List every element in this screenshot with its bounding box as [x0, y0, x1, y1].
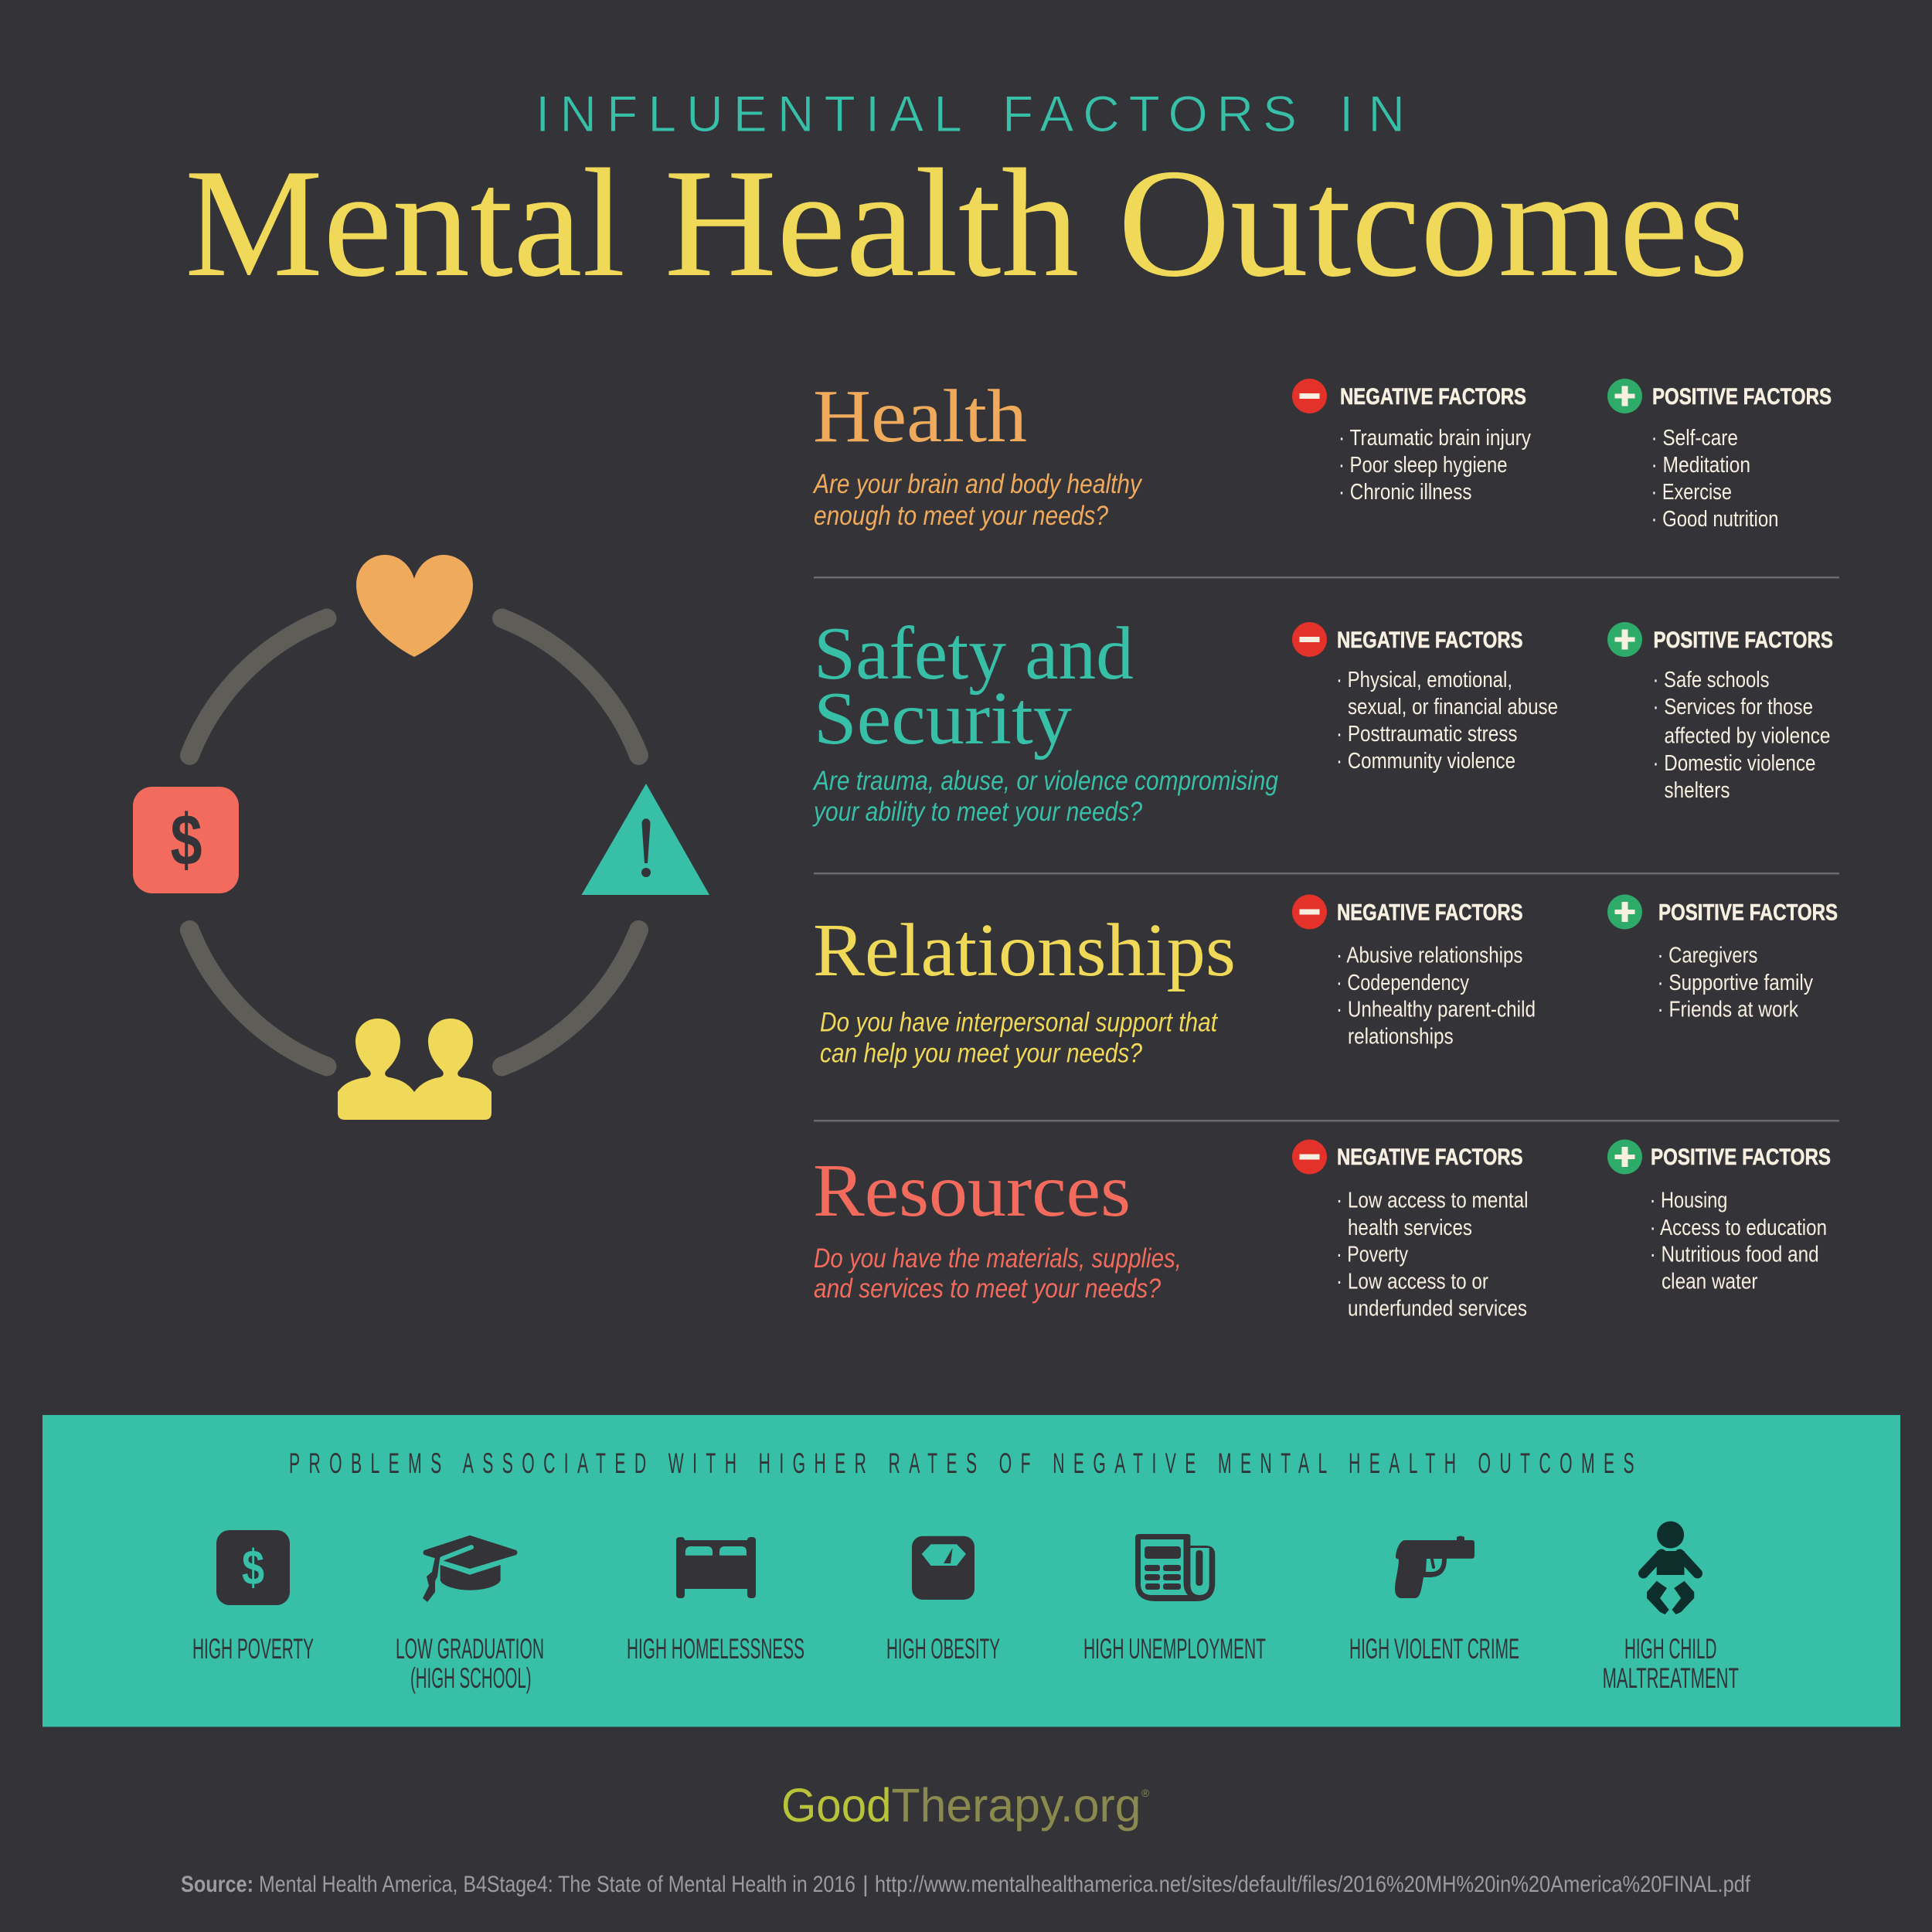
question: safety: Are trauma, abuse, or violence compromising	[812, 766, 1278, 796]
icon: dollar	[216, 1530, 290, 1605]
item: high unemployment	[1083, 1534, 1266, 1665]
question: resources	[814, 1243, 1182, 1304]
label: HIGH CHILD	[1624, 1633, 1717, 1665]
positive factors list: · Housing	[1650, 1189, 1727, 1213]
title: influential factors in: FACTORS	[1002, 85, 1297, 142]
logo: goodtherapy.org: Good	[781, 1779, 892, 1832]
icon: newspaper	[1135, 1534, 1215, 1601]
icon: heart	[356, 555, 473, 657]
icon: dollar box: $	[170, 799, 202, 880]
cycle diagram	[133, 555, 709, 1120]
icon: plus	[1607, 1139, 1642, 1175]
panel: problems band	[43, 1415, 1900, 1726]
negative factors list: health services	[1348, 1216, 1472, 1240]
icon: minus	[1292, 379, 1327, 413]
question: safety	[812, 766, 1278, 827]
icon: minus	[1292, 1139, 1327, 1175]
negative factors list: · Low access to mental	[1336, 1189, 1529, 1213]
logo: goodtherapy.org	[781, 1779, 1150, 1832]
positive factors list: · Domestic violence	[1652, 751, 1816, 776]
logo: goodtherapy.org: Therapy.org	[892, 1779, 1141, 1832]
positive factors list: · Good nutrition	[1651, 507, 1779, 532]
heading: safety and security	[814, 612, 1134, 760]
icon: baby	[1643, 1521, 1697, 1614]
positive factors heading: POSITIVE FACTORS	[1658, 900, 1838, 926]
question: health	[812, 469, 1143, 531]
positive factors list: · Services for those	[1652, 695, 1813, 719]
negative factors list: · Posttraumatic stress	[1336, 722, 1518, 747]
negative factors list: · Codependency	[1336, 971, 1469, 995]
question: resources: and services to meet your needs?	[814, 1274, 1161, 1304]
positive factors list	[1651, 426, 1779, 532]
icon: minus	[1292, 895, 1327, 929]
question: relationships: Do you have interpersonal support that	[820, 1008, 1218, 1037]
positive factors list: · Exercise	[1651, 480, 1732, 505]
negative factors list: · Low access to or	[1336, 1269, 1488, 1294]
heading: safety and security: Security	[814, 677, 1072, 760]
title: mental health outcomes: Mental Health Outcomes	[185, 138, 1749, 309]
negative factors heading: NEGATIVE FACTORS	[1337, 628, 1522, 653]
item: low graduation	[396, 1536, 544, 1694]
negative factors heading: NEGATIVE FACTORS	[1337, 1145, 1522, 1170]
label: HIGH VIOLENT CRIME	[1349, 1633, 1519, 1665]
icon: dollar box	[133, 787, 239, 893]
icon: plus	[1607, 895, 1642, 929]
negative factors list	[1336, 668, 1558, 774]
title: influential factors in	[536, 85, 1405, 142]
item: high violent crime	[1349, 1536, 1519, 1665]
title: influential factors in: IN	[1339, 85, 1405, 142]
icon: bed	[676, 1537, 756, 1598]
positive factors list: · Safe schools	[1652, 668, 1770, 692]
positive factors list	[1650, 1189, 1827, 1294]
label: (HIGH SCHOOL)	[410, 1662, 532, 1694]
positive factors heading: POSITIVE FACTORS	[1654, 628, 1833, 653]
heading: health: Health	[813, 375, 1027, 458]
label	[396, 1633, 544, 1694]
positive factors list: clean water	[1662, 1269, 1758, 1294]
positive factors list	[1652, 668, 1830, 803]
heading: resources: Resources	[813, 1149, 1131, 1233]
icon: two people	[338, 1019, 492, 1120]
label: LOW GRADUATION	[396, 1633, 544, 1665]
positive factors list: · Supportive family	[1657, 971, 1813, 995]
icon: graduation cap	[423, 1536, 518, 1602]
panel: relationships	[813, 895, 1838, 1068]
label: HIGH POVERTY	[192, 1633, 314, 1665]
heading: safety and security: Safety and	[814, 612, 1134, 696]
negative factors list: sexual, or financial abuse	[1348, 695, 1558, 719]
logo: goodtherapy.org: ®	[1141, 1787, 1150, 1799]
question: health: enough to meet your needs?	[814, 501, 1108, 531]
negative factors list: · Traumatic brain injury	[1338, 426, 1531, 451]
negative factors list: underfunded services	[1348, 1297, 1527, 1321]
positive factors list: affected by violence	[1665, 724, 1830, 749]
icon: warning triangle	[581, 784, 709, 895]
item: high obesity	[886, 1536, 1000, 1665]
positive factors list: · Friends at work	[1657, 997, 1798, 1022]
positive factors list: · Nutritious food and	[1650, 1242, 1819, 1267]
source line: Mental Health America, B4Stage4: The State of Mental Health in 2016	[259, 1872, 855, 1897]
icon: scale	[912, 1536, 975, 1600]
question: safety: your ability to meet your needs?	[812, 797, 1142, 827]
negative factors list: relationships	[1348, 1025, 1454, 1049]
ring arcs	[189, 618, 638, 1066]
heading: relationships: Relationships	[813, 909, 1236, 992]
item: high homelessness	[627, 1537, 804, 1665]
item: high poverty	[192, 1530, 314, 1665]
negative factors list	[1336, 1189, 1529, 1321]
icon: dollar: $	[242, 1539, 264, 1595]
panel: safety and security	[812, 612, 1833, 827]
panel: health	[812, 375, 1832, 532]
negative factors heading: NEGATIVE FACTORS	[1340, 384, 1526, 410]
item: high child maltreatment	[1603, 1521, 1739, 1694]
question: relationships: can help you meet your needs?	[820, 1039, 1142, 1068]
negative factors list: · Physical, emotional,	[1336, 668, 1512, 692]
negative factors list: · Abusive relationships	[1336, 944, 1522, 968]
panel: resources	[813, 1139, 1831, 1321]
label: MALTREATMENT	[1603, 1662, 1739, 1694]
negative factors list: · Poverty	[1336, 1242, 1408, 1267]
icon: handgun	[1395, 1536, 1475, 1598]
question: resources: Do you have the materials, supplies,	[814, 1243, 1182, 1274]
positive factors list: · Self-care	[1651, 426, 1738, 451]
source line: |	[862, 1872, 869, 1897]
icon: plus	[1607, 622, 1642, 657]
label	[1603, 1633, 1739, 1694]
negative factors list: · Chronic illness	[1338, 480, 1471, 505]
label: HIGH UNEMPLOYMENT	[1083, 1633, 1266, 1665]
positive factors heading: POSITIVE FACTORS	[1651, 1145, 1831, 1170]
label: HIGH OBESITY	[886, 1633, 1000, 1665]
positive factors list: · Caregivers	[1657, 944, 1757, 968]
question: health: Are your brain and body healthy	[812, 469, 1143, 499]
source line: Source:	[181, 1872, 253, 1897]
source line	[181, 1872, 1751, 1897]
negative factors list: · Community violence	[1336, 749, 1515, 774]
negative factors list	[1338, 426, 1531, 505]
band background	[43, 1415, 1900, 1726]
label: HIGH HOMELESSNESS	[627, 1633, 804, 1665]
source line: http://www.mentalhealthamerica.net/sites/default/files/2016%20MH%20in%20America%20FINAL.pdf	[875, 1872, 1751, 1897]
positive factors list: · Meditation	[1651, 453, 1750, 478]
title: influential factors in: INFLUENTIAL	[536, 85, 962, 142]
positive factors list: · Access to education	[1650, 1216, 1827, 1240]
icon: plus	[1607, 379, 1642, 413]
negative factors list	[1336, 944, 1536, 1049]
positive factors heading: POSITIVE FACTORS	[1652, 384, 1832, 410]
negative factors list: · Unhealthy parent-child	[1336, 997, 1536, 1022]
positive factors list: shelters	[1665, 778, 1730, 803]
negative factors heading: NEGATIVE FACTORS	[1337, 900, 1522, 926]
question: relationships	[820, 1008, 1218, 1068]
icon: minus	[1292, 622, 1327, 657]
negative factors list: · Poor sleep hygiene	[1338, 453, 1507, 478]
positive factors list	[1657, 944, 1813, 1022]
